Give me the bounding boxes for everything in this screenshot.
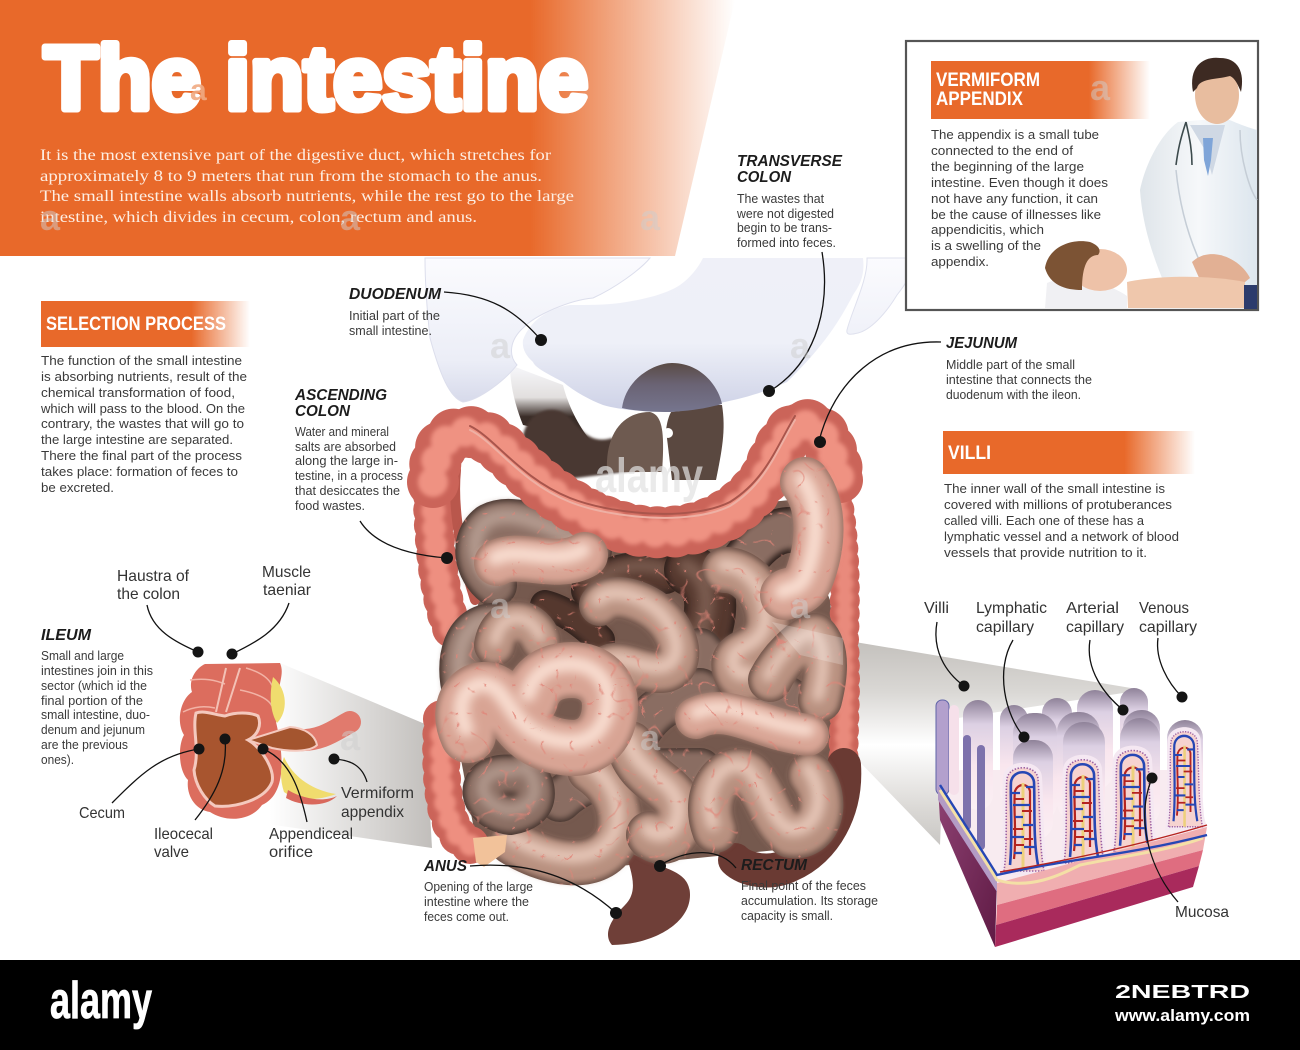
body text: is a swelling of the (931, 239, 1041, 253)
callout: jejunum: duodenum with the ileon. (946, 388, 1081, 402)
intro text (40, 147, 574, 226)
intro text: approximately 8 to 9 meters that run from the stomach to the anus. (40, 168, 542, 185)
callout: ileum: denum and jejunum (41, 723, 145, 737)
callout: transverse colon: TRANSVERSE (737, 153, 843, 170)
callout: anus: Opening of the large (424, 880, 533, 894)
solid part of the banner (0, 0, 531, 256)
callout: rectum: RECTUM (741, 857, 808, 874)
label: arterial capillary: Arterial (1066, 600, 1119, 617)
label: haustra of the colon: Haustra of (117, 568, 190, 585)
label: appendiceal orifice: Appendiceal (269, 826, 353, 843)
watermark marks: a (340, 197, 361, 238)
label: lymphatic capillary: capillary (976, 619, 1034, 636)
tissue layers (938, 787, 997, 947)
panel: villi (943, 431, 1195, 560)
callout: jejunum (814, 335, 1092, 448)
child's face (1073, 249, 1127, 291)
body text: the large intestine are separated. (41, 433, 233, 447)
callout: anus (423, 858, 622, 924)
footer logo: alamy (50, 972, 152, 1030)
callout: ascending colon: testine, in a process (295, 469, 403, 483)
callout: ileum: intestines join in this (41, 664, 153, 678)
label: muscle taeniar: Muscle (262, 564, 311, 581)
website: www.alamy.com (1114, 1006, 1250, 1025)
callout: rectum: Final point of the feces (741, 879, 866, 893)
body text: appendicitis, which (931, 223, 1044, 237)
body text: vessels that provide nutrition to it. (944, 546, 1147, 560)
watermark marks: a (640, 717, 661, 758)
watermark marks (40, 67, 1111, 758)
label: cecum: Cecum (79, 805, 125, 822)
front row of villi (1000, 727, 1206, 875)
label: mucosa: Mucosa (1175, 904, 1229, 921)
callout: jejunum: intestine that connects the (946, 373, 1092, 387)
callout: ascending colon: that desiccates the (295, 484, 400, 498)
body text: There the final part of the process (41, 449, 242, 463)
heading bar: VERMIFORM (936, 70, 1040, 91)
body text: The appendix is a small tube (931, 128, 1099, 142)
heading bar: VILLI (948, 443, 991, 464)
body text: not have any function, it can (931, 192, 1098, 206)
body text: be the cause of illnesses like (931, 208, 1101, 222)
watermark marks: a (490, 585, 511, 626)
callout: ileum: sector (which id the (41, 679, 147, 693)
light cone: ileum zoom (240, 663, 432, 848)
label: venous capillary: Venous (1139, 600, 1189, 617)
callout: anus: ANUS (423, 858, 467, 875)
callout: ascending colon (294, 387, 453, 564)
label: appendiceal orifice (258, 744, 353, 861)
main body (523, 258, 863, 412)
label: haustra of the colon: the colon (117, 586, 180, 603)
label: ileocecal valve: valve (154, 844, 189, 861)
heading bar: APPENDIX (936, 89, 1023, 110)
intro text: It is the most extensive part of the digestive duct, which stretches for (40, 147, 552, 164)
dome seen through the stomach (622, 363, 722, 412)
body text: chemical transformation of food, (41, 386, 235, 400)
dark backing of the abdominal mass (450, 500, 848, 868)
panel: vermiform appendix (906, 41, 1258, 310)
watermark marks: a (340, 717, 361, 758)
hands (1192, 254, 1250, 290)
callout: duodenum: Initial part of the (349, 309, 440, 323)
label: venous capillary: capillary (1139, 619, 1197, 636)
label: appendiceal orifice: orifice (269, 844, 313, 861)
callout: rectum: accumulation. Its storage (741, 894, 878, 908)
callout: ileum: are the previous (41, 738, 128, 752)
callout: rectum (654, 853, 878, 923)
pillow (1045, 279, 1127, 308)
body text: lymphatic vessel and a network of blood (944, 530, 1179, 544)
body text: The inner wall of the small intestine is (944, 482, 1165, 496)
callout: ileum: small intestine, duo- (41, 708, 150, 722)
body text (944, 482, 1179, 560)
callout: ascending colon: ASCENDING (294, 387, 387, 404)
label: lymphatic capillary: Lymphatic (976, 600, 1047, 617)
villi block (936, 688, 1207, 947)
title: The intestine (44, 29, 588, 129)
callout: duodenum (349, 286, 547, 346)
cut villi on side face (936, 700, 985, 850)
anal opening (473, 835, 507, 867)
label: muscle taeniar: taeniar (263, 582, 312, 599)
callout: transverse colon: were not digested (736, 207, 834, 221)
callout: ascending colon: along the large in- (295, 454, 398, 468)
callout: anus: intestine where the (424, 895, 529, 909)
label: arterial capillary (1066, 600, 1128, 716)
callout: ileum: final portion of the (41, 694, 143, 708)
body text: appendix. (931, 255, 989, 269)
label: venous capillary (1139, 600, 1197, 702)
label: lymphatic capillary (976, 600, 1047, 742)
callout: rectum: capacity is small. (741, 909, 833, 923)
body text (931, 128, 1108, 269)
large intestine: ascending colon (433, 470, 475, 845)
coat (1140, 118, 1257, 285)
image id: 2NEBTRD (1115, 982, 1250, 1002)
callout: duodenum: small intestine. (349, 324, 432, 338)
watermark marks: a (190, 74, 207, 107)
label: vermiform appendix: Vermiform (341, 785, 414, 802)
body text: is absorbing nutrients, result of the (41, 370, 247, 384)
watermark marks: a (40, 197, 61, 238)
child's torso (1127, 277, 1245, 308)
body text: contrary, the wastes that will go to (41, 417, 244, 431)
callout: ileum (41, 627, 153, 767)
callout: transverse colon: The wastes that (737, 192, 825, 206)
body text: The function of the small intestine (41, 354, 242, 368)
haustra outline (180, 663, 282, 819)
label: vermiform appendix (328, 754, 414, 821)
body text: called villi. Each one of these has a (944, 514, 1144, 528)
left lobe (425, 258, 650, 402)
callout: transverse colon: formed into feces. (737, 236, 836, 250)
title banner (0, 0, 735, 256)
watermark marks: a (490, 325, 511, 366)
watermark marks: a (790, 325, 811, 366)
watermark marks: alamy (595, 450, 703, 503)
callout: duodenum: DUODENUM (349, 286, 442, 303)
label: ileocecal valve: Ileocecal (154, 826, 213, 843)
label: vermiform appendix: appendix (341, 804, 404, 821)
translucent overlay where the zoom cone starts (772, 622, 843, 665)
body text: intestine. Even though it does (931, 176, 1108, 190)
illustration: ileum and cecum (180, 663, 350, 819)
heading bar: SELECTION PROCESS (46, 314, 226, 335)
body text: covered with millions of protuberances (944, 498, 1172, 512)
large intestine: transverse colon (433, 416, 840, 532)
callout: ileum: ones). (41, 753, 74, 767)
label: ileocecal valve (154, 734, 230, 861)
label: mucosa (1145, 772, 1229, 921)
body text: the beginning of the large (931, 160, 1084, 174)
callout: anus: feces come out. (424, 910, 509, 924)
label: arterial capillary: capillary (1066, 619, 1124, 636)
body text: connected to the end of (931, 144, 1074, 158)
callout: ileum: ILEUM (41, 627, 92, 644)
watermark marks: a (790, 585, 811, 626)
right lobe (847, 258, 913, 334)
small intestine front loops (461, 479, 825, 748)
intro text: intestine, which divides in cecum, colon, rectum and anus. (40, 209, 477, 226)
callout: transverse colon: COLON (737, 169, 791, 186)
callout: transverse colon (736, 153, 843, 397)
rectum (608, 850, 690, 945)
intro text: The small intestine walls absorb nutrients, while the rest go to the large (40, 188, 574, 205)
mucosal floor (938, 770, 1207, 883)
panel: selection process (40, 301, 250, 495)
callout: ileum: Small and large (41, 649, 124, 663)
watermark marks: a (1090, 67, 1111, 108)
callout: jejunum: JEJUNUM (946, 335, 1018, 352)
large intestine: descending colon (735, 460, 845, 870)
callout: ascending colon: salts are absorbed (295, 440, 396, 454)
appendix interior (248, 727, 317, 751)
anatomy: stomach and upper organs (425, 258, 913, 480)
label: muscle taeniar (226, 564, 312, 660)
cecum interior (194, 712, 272, 806)
light cone: villi zoom (843, 640, 1143, 845)
label: villi (924, 600, 970, 692)
callout: ascending colon: COLON (295, 403, 350, 420)
callout: jejunum: Middle part of the small (946, 358, 1075, 372)
body text: be excreted. (41, 481, 114, 495)
heading bar (943, 431, 1195, 474)
duodenal tube (607, 412, 663, 472)
callout: ascending colon: Water and mineral (295, 425, 389, 439)
photo: doctor examining child (1045, 58, 1257, 309)
footer band (0, 960, 1300, 1050)
vermiform appendix tube (296, 722, 350, 740)
body text (40, 354, 247, 495)
small intestine loops (459, 516, 820, 862)
label: villi: Villi (924, 600, 949, 617)
fat tissue (271, 677, 285, 723)
heading bar (41, 301, 250, 347)
body text: takes place: formation of feces to (41, 465, 238, 479)
illustration: intestines (433, 416, 848, 945)
watermark marks: a (640, 197, 661, 238)
label: cecum (79, 744, 204, 822)
callout: transverse colon: begin to be trans- (737, 221, 832, 235)
heading bar (931, 61, 1150, 119)
callout: ascending colon: food wastes. (295, 499, 365, 513)
back row of villi (963, 688, 1203, 840)
pale neck (510, 365, 590, 440)
vessels (940, 790, 1203, 883)
body text: which will pass to the blood. On the (40, 402, 245, 416)
label: haustra of the colon (117, 568, 204, 658)
